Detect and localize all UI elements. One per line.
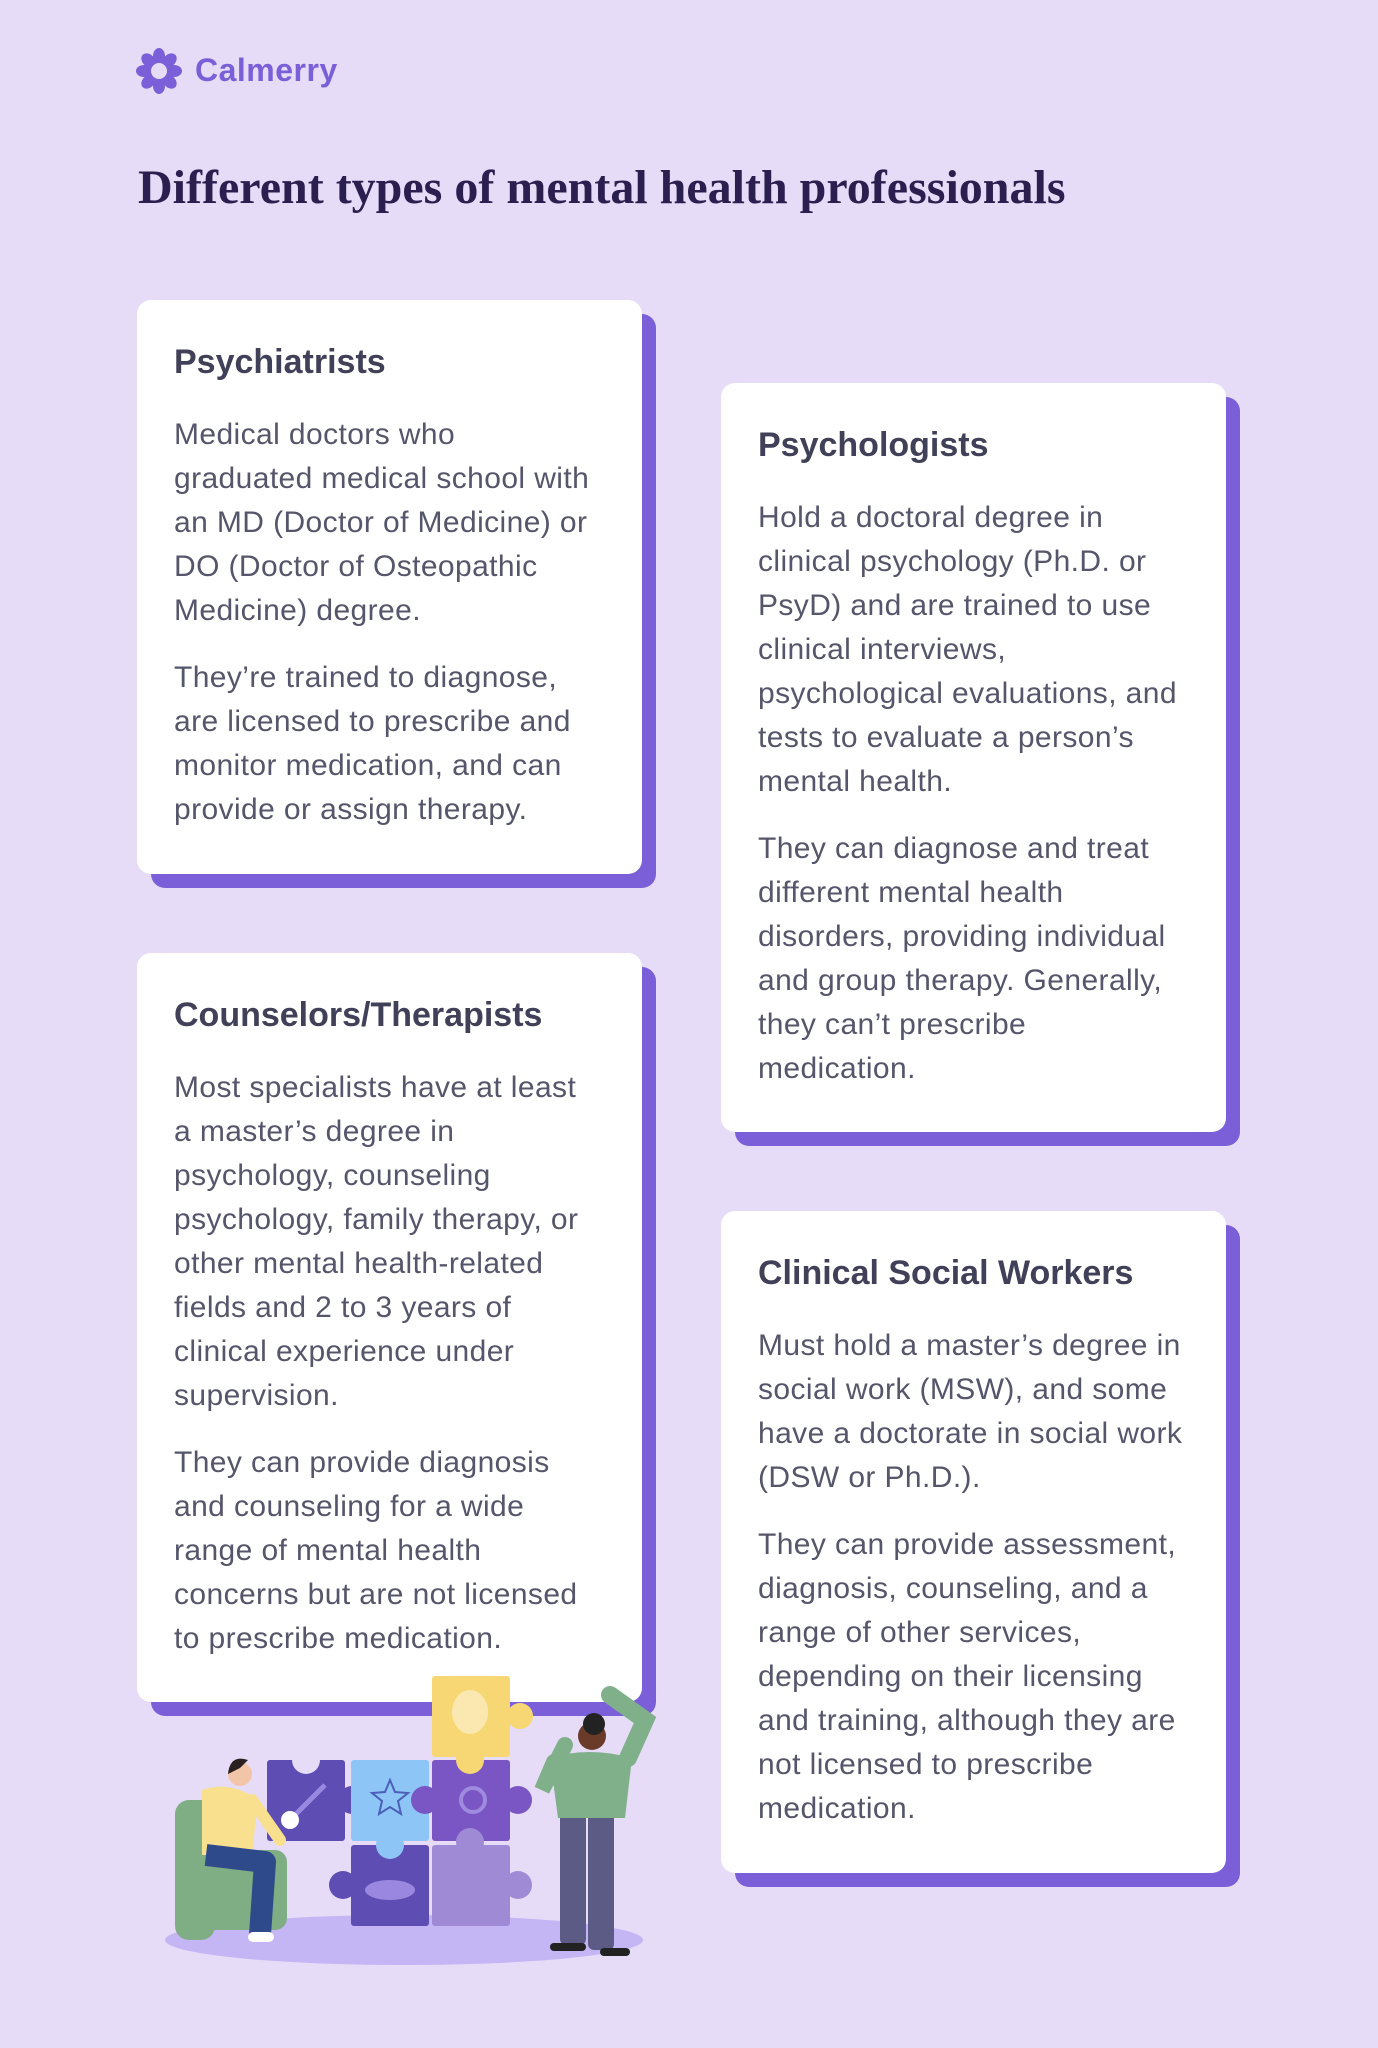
panel: psychiatrists [137, 300, 642, 874]
text block: provide or assign therapy. [174, 793, 527, 826]
text block: clinical experience under [174, 1335, 514, 1368]
text block [174, 661, 571, 826]
heading: Psychiatrists [174, 343, 386, 381]
text block [758, 501, 1177, 798]
person: seated woman [175, 1759, 287, 1942]
title: Different types of mental health professionals [138, 161, 1066, 214]
text block: They can provide assessment, [758, 1528, 1176, 1561]
heading: Psychologists [758, 426, 989, 464]
text block: an MD (Doctor of Medicine) or [174, 506, 587, 539]
icon: flower [136, 48, 182, 94]
text block: mental health. [758, 765, 952, 798]
text block [758, 1329, 1182, 1494]
text block: a master’s degree in [174, 1115, 454, 1148]
panel: counselors [137, 953, 642, 1702]
text block: to prescribe medication. [174, 1622, 502, 1655]
text block: Hold a doctoral degree in [758, 501, 1103, 534]
heading: Clinical Social Workers [758, 1254, 1133, 1292]
text block: psychology, counseling [174, 1159, 491, 1192]
text block: range of other services, [758, 1616, 1081, 1649]
brand name: Calmerry [195, 52, 338, 88]
heading: Counselors/Therapists [174, 996, 542, 1034]
text block [174, 418, 589, 627]
text block: tests to evaluate a person’s [758, 721, 1134, 754]
text block: and group therapy. Generally, [758, 964, 1162, 997]
text block: other mental health-related [174, 1247, 543, 1280]
text block: PsyD) and are trained to use [758, 589, 1151, 622]
text block: They’re trained to diagnose, [174, 661, 557, 694]
text block: concerns but are not licensed [174, 1578, 578, 1611]
text block: are licensed to prescribe and [174, 705, 571, 738]
text block: DO (Doctor of Osteopathic [174, 550, 537, 583]
panel: social workers [721, 1211, 1226, 1873]
text block: Must hold a master’s degree in [758, 1329, 1181, 1362]
text block: They can provide diagnosis [174, 1446, 550, 1479]
text block: Most specialists have at least [174, 1071, 576, 1104]
text block: not licensed to prescribe [758, 1748, 1093, 1781]
text block: clinical interviews, [758, 633, 1006, 666]
text block: psychology, family therapy, or [174, 1203, 578, 1236]
text block: fields and 2 to 3 years of [174, 1291, 511, 1324]
text block: graduated medical school with [174, 462, 589, 495]
text block: they can’t prescribe [758, 1008, 1026, 1041]
text block [758, 1528, 1176, 1825]
text block: social work (MSW), and some [758, 1373, 1167, 1406]
text block: They can diagnose and treat [758, 832, 1149, 865]
text block: (DSW or Ph.D.). [758, 1461, 981, 1494]
text block: and counseling for a wide [174, 1490, 524, 1523]
text block: clinical psychology (Ph.D. or [758, 545, 1146, 578]
text block: different mental health [758, 876, 1064, 909]
text block: have a doctorate in social work [758, 1417, 1182, 1450]
text block [758, 832, 1166, 1085]
text block: supervision. [174, 1379, 339, 1412]
text block: medication. [758, 1052, 916, 1085]
text block: medication. [758, 1792, 916, 1825]
text block: range of mental health [174, 1534, 481, 1567]
text block: diagnosis, counseling, and a [758, 1572, 1148, 1605]
panel: psychologists [721, 383, 1226, 1132]
logo [136, 48, 338, 94]
floor ellipse [165, 1915, 643, 1965]
text block: and training, although they are [758, 1704, 1176, 1737]
text block: depending on their licensing [758, 1660, 1143, 1693]
text block [174, 1071, 578, 1412]
text block [174, 1446, 578, 1655]
text block: psychological evaluations, and [758, 677, 1177, 710]
person: standing man [542, 1695, 645, 1956]
text block: Medicine) degree. [174, 594, 421, 627]
text block: monitor medication, and can [174, 749, 562, 782]
text block: Medical doctors who [174, 418, 455, 451]
puzzle pieces [267, 1676, 533, 1926]
text block: disorders, providing individual [758, 920, 1166, 953]
illustration: puzzle with people [165, 1676, 656, 1965]
